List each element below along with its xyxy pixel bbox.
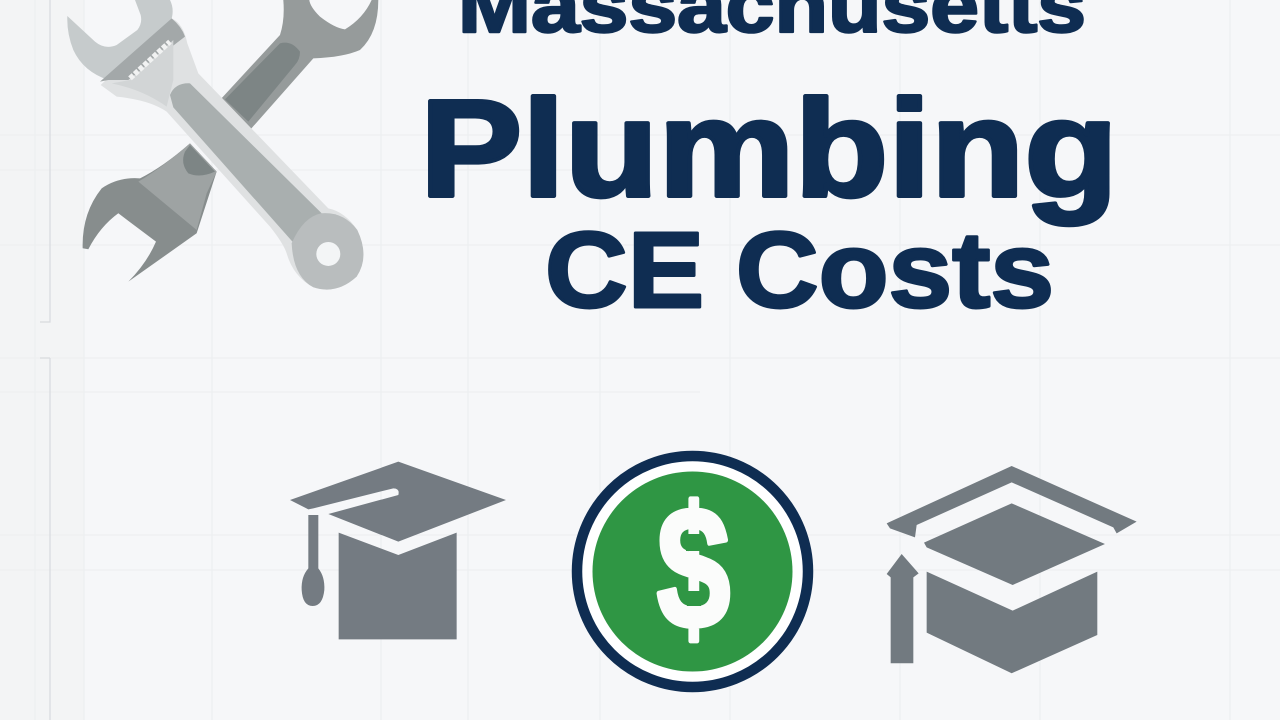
front wrench, light grey [67,0,363,290]
title: CE Costs: CE Costs [545,209,1054,330]
icon: crossed wrenches [67,0,378,290]
icon: dollar coin [577,456,808,687]
icon: graduation cap left [290,462,506,639]
back wrench, dark grey [83,0,378,282]
icon: graduation cap right [887,466,1137,673]
title: Plumbing: Plumbing [420,72,1118,226]
icon: dollar coin: $ [657,470,730,665]
